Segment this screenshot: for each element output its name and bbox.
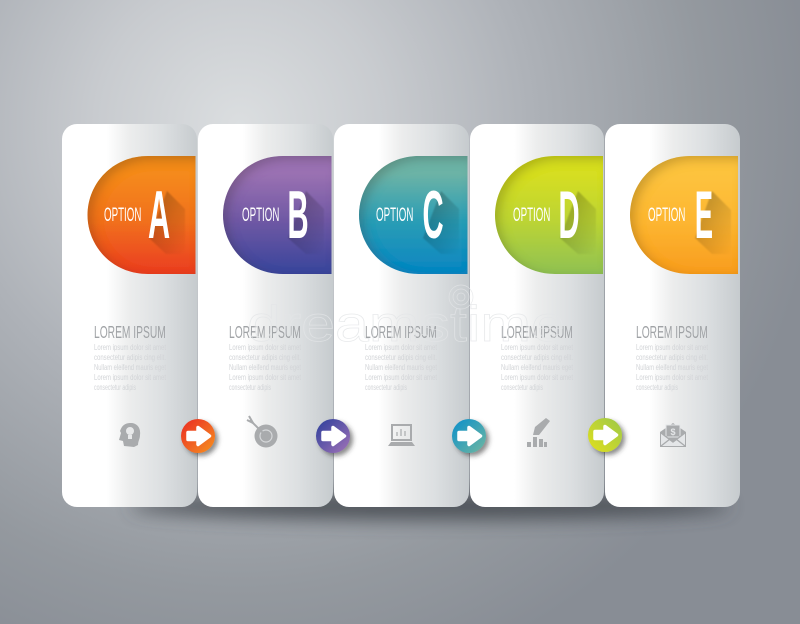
body text D: consectetur adipis cing elit. (501, 353, 573, 362)
body text A: Lorem ipsum dolor sit amet (94, 373, 167, 382)
body text E: consectetur adipis cing elit. (636, 353, 708, 362)
body text C: consectetur adipis (365, 383, 407, 392)
watermark (247, 285, 565, 352)
card B (198, 124, 333, 507)
card D (470, 124, 604, 507)
card E (605, 124, 740, 507)
panel: option C (334, 124, 469, 507)
body text B (229, 343, 302, 392)
tab B (223, 156, 332, 274)
tab E long shadow (695, 191, 731, 254)
tab B long shadow (288, 191, 324, 254)
ground shadow (130, 492, 730, 520)
body text C: Nullam eleifend mauris eget (365, 363, 438, 372)
label option A: OPTION (104, 205, 141, 226)
icon: laptop with chart (388, 424, 415, 446)
body text A: consectetur adipis cing elit. (94, 353, 166, 362)
tab A long shadow (149, 191, 185, 254)
tab E (630, 156, 738, 274)
icon: head with light bulb (119, 423, 140, 447)
tab C long shadow (423, 191, 459, 254)
body text C: Lorem ipsum dolor sit amet (365, 343, 438, 352)
letter C: C (422, 178, 444, 254)
label option E: OPTION (648, 205, 685, 226)
body text D (501, 343, 574, 392)
body text D: Lorem ipsum dolor sit amet (501, 373, 574, 382)
body text E: Lorem ipsum dolor sit amet (636, 343, 709, 352)
heading B: LOREM IPSUM (229, 323, 301, 343)
panel: option B (198, 124, 333, 507)
card A (62, 124, 197, 507)
label option D: OPTION (513, 205, 550, 226)
body text E: consectetur adipis (636, 383, 678, 392)
body text E: Lorem ipsum dolor sit amet (636, 373, 709, 382)
body text A: Nullam eleifend mauris eget (94, 363, 167, 372)
heading A: LOREM IPSUM (94, 323, 166, 343)
body text A (94, 343, 167, 392)
heading E: LOREM IPSUM (636, 323, 708, 343)
card C (334, 124, 469, 507)
arrow B to C (316, 419, 350, 453)
body text A: Lorem ipsum dolor sit amet (94, 343, 167, 352)
panel: option D (470, 124, 604, 507)
heading C: LOREM IPSUM (365, 323, 437, 343)
body text B: consectetur adipis cing elit. (229, 353, 301, 362)
tab C (359, 156, 468, 274)
body text D: consectetur adipis (501, 383, 543, 392)
label option C: OPTION (376, 205, 413, 226)
tab D (495, 156, 603, 274)
heading D: LOREM IPSUM (501, 323, 573, 343)
letter A: A (148, 177, 170, 253)
icon: envelope with money (660, 423, 686, 447)
body text B: consectetur adipis (229, 383, 271, 392)
body text C (365, 343, 438, 392)
letter B: B (287, 178, 309, 254)
body text D: Lorem ipsum dolor sit amet (501, 343, 574, 352)
tab A (88, 156, 196, 274)
icon: target with dart (247, 416, 278, 448)
body text C: consectetur adipis cing elit. (365, 353, 437, 362)
letter E: E (695, 176, 713, 252)
arrow C to D (452, 419, 486, 453)
icon: hand over bar chart (527, 418, 550, 447)
icon: envelope with money: $ (670, 427, 676, 437)
body text A: consectetur adipis (94, 383, 136, 392)
label option B: OPTION (242, 205, 279, 226)
body text C: Lorem ipsum dolor sit amet (365, 373, 438, 382)
body text D: Nullam eleifend mauris eget (501, 363, 574, 372)
arrow D to E (588, 418, 622, 452)
watermark: dreamstime (247, 296, 565, 352)
body text E: Nullam eleifend mauris eget (636, 363, 709, 372)
panel: option A (62, 124, 197, 507)
body text E (636, 343, 709, 392)
tab D long shadow (560, 191, 596, 254)
arrow A to B (181, 419, 215, 453)
body text B: Nullam eleifend mauris eget (229, 363, 302, 372)
body text B: Lorem ipsum dolor sit amet (229, 373, 302, 382)
panel: option E (605, 124, 740, 507)
body text B: Lorem ipsum dolor sit amet (229, 343, 302, 352)
letter D: D (558, 178, 580, 254)
